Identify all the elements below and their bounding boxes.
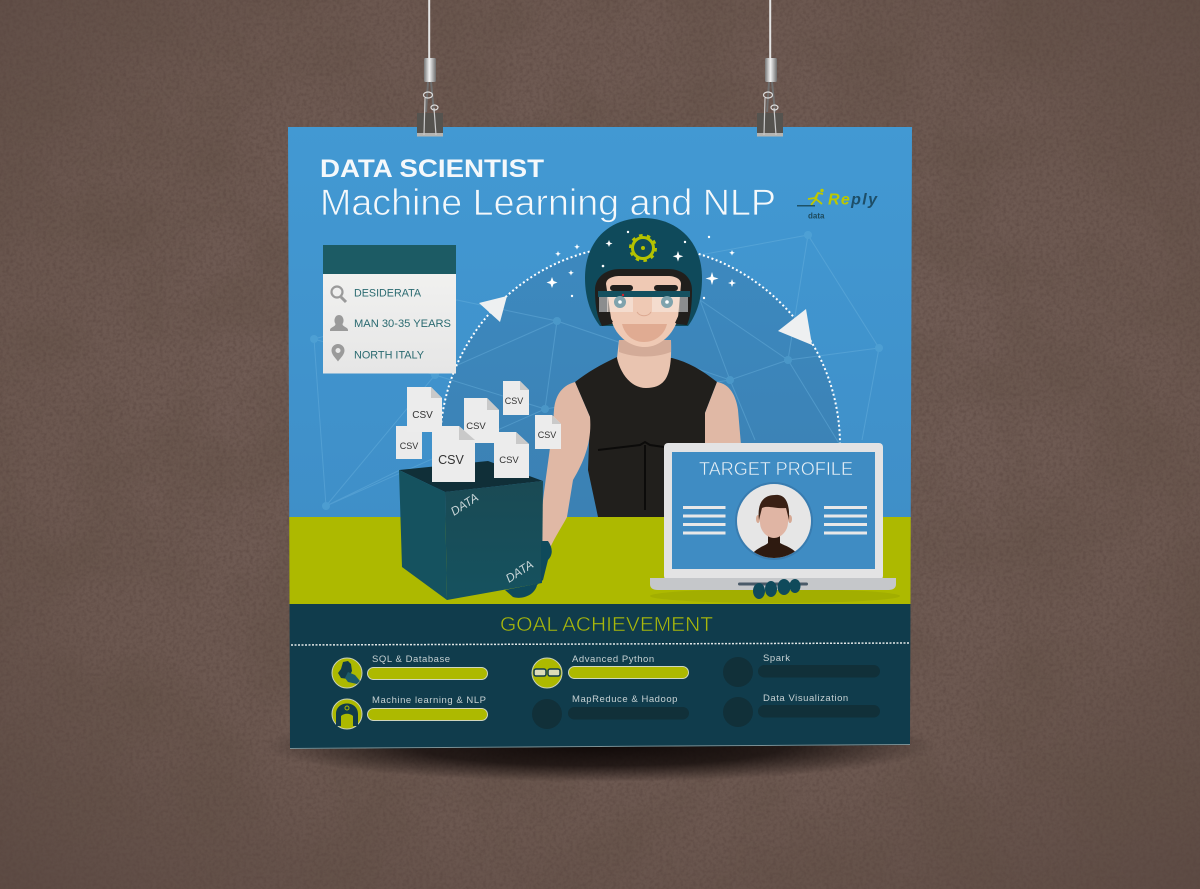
csv file 2	[396, 426, 422, 459]
helmet	[585, 218, 702, 326]
logo data: data	[808, 212, 825, 220]
csv file 4: CSV	[466, 421, 486, 432]
helmet stars	[602, 231, 686, 267]
network constellation	[310, 231, 883, 510]
goal: Data Visualization	[723, 693, 880, 727]
goal: Spark: Spark	[763, 653, 791, 664]
panel: blue sky background	[285, 125, 915, 520]
neck	[617, 340, 671, 388]
shirt	[575, 357, 717, 517]
helmet inner lining	[595, 269, 692, 326]
shirt chest seams	[598, 442, 664, 510]
goal: SQL & Database: SQL & Database	[372, 654, 451, 665]
box back interior	[399, 461, 543, 492]
logo	[797, 189, 878, 220]
csv file 7: CSV	[538, 430, 556, 440]
csv file 1: CSV	[412, 410, 433, 421]
csv file 2: CSV	[400, 441, 418, 451]
laptop heading: TARGET PROFILE	[699, 458, 853, 479]
goal: SQL & Database	[332, 654, 488, 688]
label: desiderata: DESIDERATA	[354, 288, 422, 300]
title line 2: Machine Learning and NLP	[320, 182, 776, 223]
nose	[637, 312, 651, 316]
laptop shadow	[650, 589, 900, 603]
sparkle stars	[546, 236, 736, 299]
goal: MapReduce & Hadoop: MapReduce & Hadoop	[572, 694, 678, 705]
data box	[399, 470, 543, 600]
title line 1: DATA SCIENTIST	[320, 155, 544, 183]
gear emblem	[630, 236, 656, 260]
title	[320, 155, 776, 223]
icon: magnifier	[332, 286, 346, 302]
eyebrows	[610, 285, 678, 291]
goal: Data Visualization: Data Visualization	[763, 693, 849, 704]
csv file 6	[503, 381, 529, 415]
poster drop shadow	[265, 710, 935, 782]
label: age: MAN 30-35 YEARS	[354, 318, 451, 330]
mouth	[622, 324, 667, 342]
goal: Spark	[723, 653, 880, 687]
csv file 3	[432, 426, 475, 482]
laptop lid	[664, 443, 883, 580]
logo line	[797, 205, 815, 206]
hanging clip: right	[757, 0, 783, 136]
dome behind the character	[442, 252, 840, 517]
dotted orbit arc	[440, 245, 840, 445]
helmet flaps	[602, 316, 688, 326]
ground: green table	[285, 517, 915, 607]
csv file 6: CSV	[505, 396, 523, 406]
arm: left	[541, 382, 590, 548]
logo wordmark: Reply	[828, 192, 878, 208]
icon: location pin	[332, 344, 344, 362]
logo runner	[808, 193, 823, 205]
csv file 1	[407, 387, 442, 432]
goal: Machine learning & NLP	[332, 695, 488, 729]
logo runner head	[820, 189, 824, 192]
csv file 5	[494, 432, 529, 478]
poster bottom edge highlight	[290, 744, 910, 748]
icon: gloves	[338, 661, 360, 684]
neck shadow	[619, 340, 671, 356]
hanging clip: left	[417, 0, 443, 136]
laptop screen	[672, 452, 875, 569]
laptop base	[650, 578, 896, 590]
csv file 4	[464, 398, 499, 443]
goal: Machine learning & NLP: Machine learning & NLP	[372, 695, 487, 706]
goal: Advanced Python: Advanced Python	[572, 654, 655, 665]
csv file 7	[535, 415, 561, 449]
label: location: NORTH ITALY	[354, 350, 425, 362]
box label: lower: DATA	[503, 557, 536, 586]
info card	[323, 245, 456, 374]
goal heading: GOAL ACHIEVEMENT	[500, 614, 713, 636]
dotted divider	[291, 643, 910, 645]
laptop groove	[738, 582, 808, 586]
avatar	[735, 482, 813, 560]
box label: upper: DATA	[448, 490, 481, 519]
icon: user	[330, 315, 348, 331]
icon: helmet	[336, 704, 358, 726]
character	[541, 218, 741, 548]
orbit arrow: left	[479, 296, 507, 322]
panel: bottom band	[285, 604, 915, 754]
csv file 3: CSV	[438, 453, 465, 467]
arm: right	[705, 382, 741, 445]
face	[606, 276, 681, 347]
fingers on laptop	[753, 579, 800, 599]
poster	[285, 125, 915, 754]
goal: Advanced Python	[532, 654, 688, 688]
laptop	[650, 443, 900, 603]
orbit arrow: right	[778, 309, 812, 345]
goal: MapReduce & Hadoop	[532, 694, 689, 729]
csv file 5: CSV	[499, 455, 519, 466]
text lines left	[683, 506, 726, 534]
smart glasses	[598, 291, 690, 312]
icon: glasses	[534, 669, 560, 676]
text lines right	[824, 506, 867, 534]
glove holding box	[505, 541, 552, 598]
